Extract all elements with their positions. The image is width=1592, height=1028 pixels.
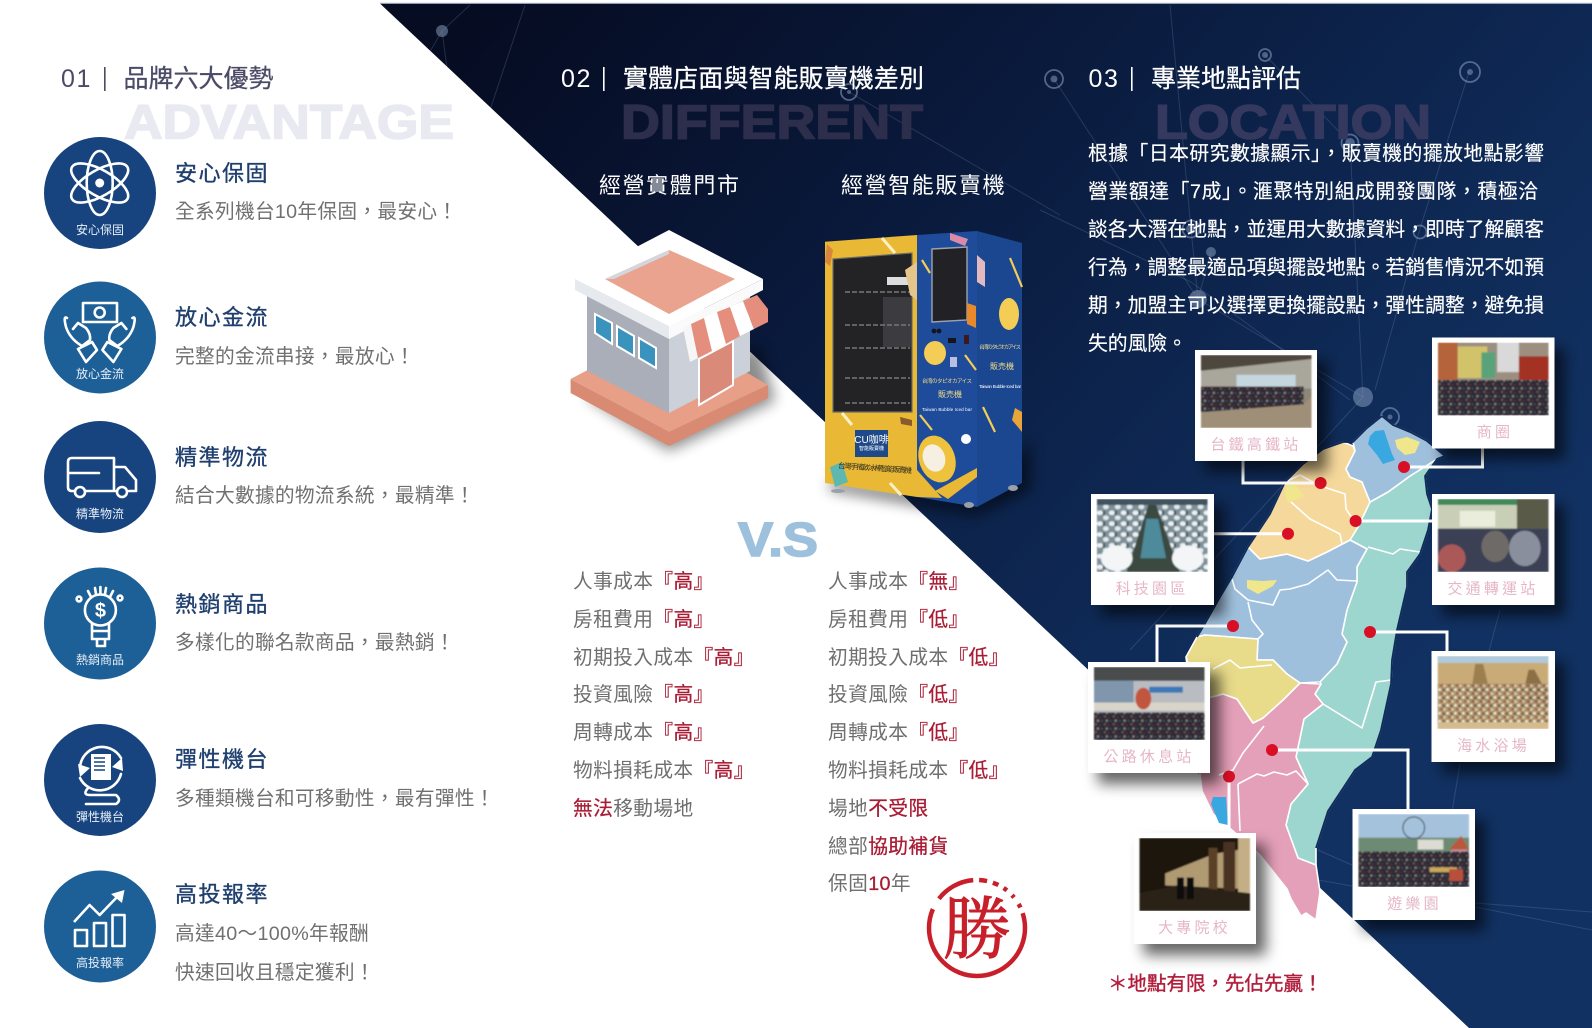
icon: growth chart [44, 870, 156, 982]
card: 台鐵高鐵站: 台鐵高鐵站 [1210, 436, 1302, 454]
map region: south pink [1186, 657, 1323, 920]
map region: north blue [1346, 416, 1445, 502]
card: 台鐵高鐵站 [1195, 350, 1317, 461]
subheading physical store: 經營實體門市 [599, 173, 741, 198]
map location dots [1223, 461, 1410, 782]
body text: 期，加盟主可以選擇更換擺設點，彈性調整，避免損 [1088, 295, 1544, 317]
card: 海水浴場: 海水浴場 [1457, 738, 1530, 754]
card: 遊樂園 [1352, 809, 1475, 920]
heading 02: 02 [561, 65, 592, 93]
watermark ADVANTAGE: ADVANTAGE [124, 96, 454, 150]
icon: truck: 精準物流 [76, 506, 124, 521]
card: 遊樂園: 遊樂園 [1387, 896, 1442, 912]
item: 高投報率: 高達40～100%年報酬 [175, 923, 369, 945]
panel: 03 location [1088, 65, 1555, 995]
list: physical store: 初期投入成本『高』 [573, 647, 754, 669]
heading 02: 實體店面與智能販賣機差別 [623, 65, 924, 93]
V.S label: V.S [738, 514, 818, 567]
body text: 根據「日本研究數據顯示」，販賣機的擺放地點影響 [1088, 143, 1544, 165]
body text: 行為，調整最適品項與擺設地點。若銷售情況不如預 [1088, 257, 1544, 279]
item: 彈性機台: 多種類機台和可移動性，最有彈性！ [175, 788, 495, 810]
heading 01: 品牌六大優勢 [124, 65, 274, 93]
machine yellow door [825, 235, 917, 497]
map region: east [1286, 459, 1437, 865]
callout: limited locations: ＊地點有限，先佔先贏！ [1108, 973, 1323, 995]
list: physical store: 無法移動場地 [573, 798, 694, 820]
item: 高投報率: 高投報率 [175, 882, 269, 907]
item: 高投報率 [44, 870, 375, 984]
icon: light bulb: 熱銷商品 [76, 652, 124, 667]
panel: 01 brand advantages [44, 65, 495, 984]
item: 熱銷商品 [44, 568, 455, 680]
icon: light bulb [44, 568, 156, 680]
item: 精準物流: 精準物流 [175, 445, 269, 470]
card: 公路休息站: 公路休息站 [1103, 748, 1195, 766]
watermark LOCATION: LOCATION [1155, 96, 1431, 150]
item: 安心保固 [44, 137, 457, 249]
watermark DIFFERENT: DIFFERENT [621, 96, 923, 150]
windows [595, 314, 656, 368]
item: 安心保固: 安心保固 [175, 161, 269, 186]
map: Taiwan [1186, 416, 1445, 920]
list: physical store: 物料損耗成本『高』 [573, 760, 754, 782]
item: 精準物流 [44, 421, 475, 533]
icon: atom: 安心保固 [76, 222, 124, 237]
body text: 營業額達「7成」。滙聚特別組成開發團隊，積極洽 [1088, 181, 1538, 203]
icon: vending machine: Taiwan Bubble Iced bar [979, 384, 1021, 389]
card: 大專院校 [1134, 833, 1256, 944]
map region: north-west tan [1248, 442, 1370, 561]
card: 科技園區 [1091, 494, 1214, 605]
map region: central blue [1197, 540, 1367, 683]
card: 商圈 [1432, 338, 1554, 448]
icon: rotating machine [44, 724, 156, 836]
list: vending machine: 總部協助補貨 [828, 836, 949, 858]
glass window [833, 253, 912, 412]
icon: vending machine [825, 231, 1030, 515]
body text [1088, 143, 1544, 355]
list: physical store: 房租費用『高』 [573, 609, 714, 631]
item: 高投報率: 快速回收且穩定獲利！ [175, 962, 375, 984]
list: vending machine: 房租費用『低』 [828, 609, 969, 631]
CU sign: CU咖啡 [854, 434, 889, 446]
item: 熱銷商品: 熱銷商品 [175, 592, 269, 617]
icon: rotating machine: 彈性機台 [76, 809, 124, 824]
card: 海水浴場 [1432, 651, 1555, 762]
list: vending machine: 初期投入成本『低』 [828, 647, 1009, 669]
list: vending machine: 物料損耗成本『低』 [828, 760, 1009, 782]
door [699, 341, 733, 405]
machine centre panel [917, 231, 977, 507]
body text: 失的風險。 [1088, 333, 1187, 355]
icon: vending machine: 販売機 [990, 361, 1014, 371]
panel: 02 store vs vending machine [561, 65, 1030, 976]
list: vending machine: 場地不受限 [828, 798, 928, 820]
card: 科技園區: 科技園區 [1116, 580, 1188, 598]
card: 公路休息站 [1088, 662, 1210, 773]
item: 彈性機台 [44, 724, 495, 836]
card: 商圈: 商圈 [1477, 424, 1513, 441]
icon: truck [44, 421, 156, 533]
awning [683, 295, 768, 362]
item: 彈性機台: 彈性機台 [175, 747, 269, 772]
icon: vending machine: 販売機 [938, 389, 962, 399]
stamp: 勝 [929, 880, 1025, 976]
heading 03: 03 [1088, 65, 1120, 93]
list: vending machine: 人事成本『無』 [828, 571, 969, 593]
list: vending machine: 周轉成本『低』 [828, 722, 969, 744]
astronaut mascot [912, 430, 977, 499]
icon: vending machine: 台湾のタピオカアイス [979, 343, 1021, 351]
list: physical store: 人事成本『高』 [573, 571, 714, 593]
icon: growth chart: 高投報率 [76, 955, 124, 970]
card: 交通轉運站 [1432, 494, 1554, 605]
icon: money hands [44, 282, 156, 394]
icon: isometric store [571, 230, 775, 451]
list: physical store: 投資風險『高』 [573, 684, 714, 706]
subheading vending machine: 經營智能販賣機 [841, 173, 1006, 198]
item: 安心保固: 全系列機台10年保固，最安心！ [175, 201, 457, 223]
icon: vending machine: 台湾のタピオカアイス [922, 377, 972, 385]
item: 放心金流: 放心金流 [175, 305, 269, 330]
item: 放心金流: 完整的金流串接，最放心！ [175, 346, 415, 368]
icon: money hands: 放心金流 [76, 366, 124, 381]
body text: 談各大潛在地點，並運用大數據資料，即時了解顧客 [1088, 219, 1544, 241]
machine side [977, 231, 1022, 507]
list: vending machine: 投資風險『低』 [828, 684, 969, 706]
item: 熱銷商品: 多樣化的聯名款商品，最熱銷！ [175, 632, 455, 654]
icon: atom [44, 137, 156, 249]
card: 大專院校: 大專院校 [1158, 918, 1231, 936]
list: physical store: 周轉成本『高』 [573, 722, 714, 744]
list: vending machine: 保固10年 [828, 873, 911, 895]
list: vending machine [828, 571, 1009, 895]
screen [932, 247, 967, 322]
stamp: 勝: 勝 [943, 892, 1011, 968]
heading 03: 專業地點評估 [1151, 65, 1301, 93]
list: physical store [573, 571, 754, 820]
CU sign: 智能販賣機 [859, 445, 884, 452]
icon: light bulb: $ [95, 600, 106, 622]
CU sign [854, 430, 889, 457]
card: 交通轉運站: 交通轉運站 [1447, 580, 1539, 598]
connector lines [1157, 448, 1482, 835]
item: 精準物流: 結合大數據的物流系統，最精準！ [175, 485, 475, 507]
heading 01: 01 [61, 65, 92, 93]
icon: vending machine: Taiwan Bubble Iced bar [922, 407, 972, 412]
map region: south yellow [1186, 635, 1300, 723]
item: 放心金流 [44, 282, 415, 394]
icon: vending machine: 台灣手搖飲冰棒智能販賣機 [838, 461, 913, 475]
